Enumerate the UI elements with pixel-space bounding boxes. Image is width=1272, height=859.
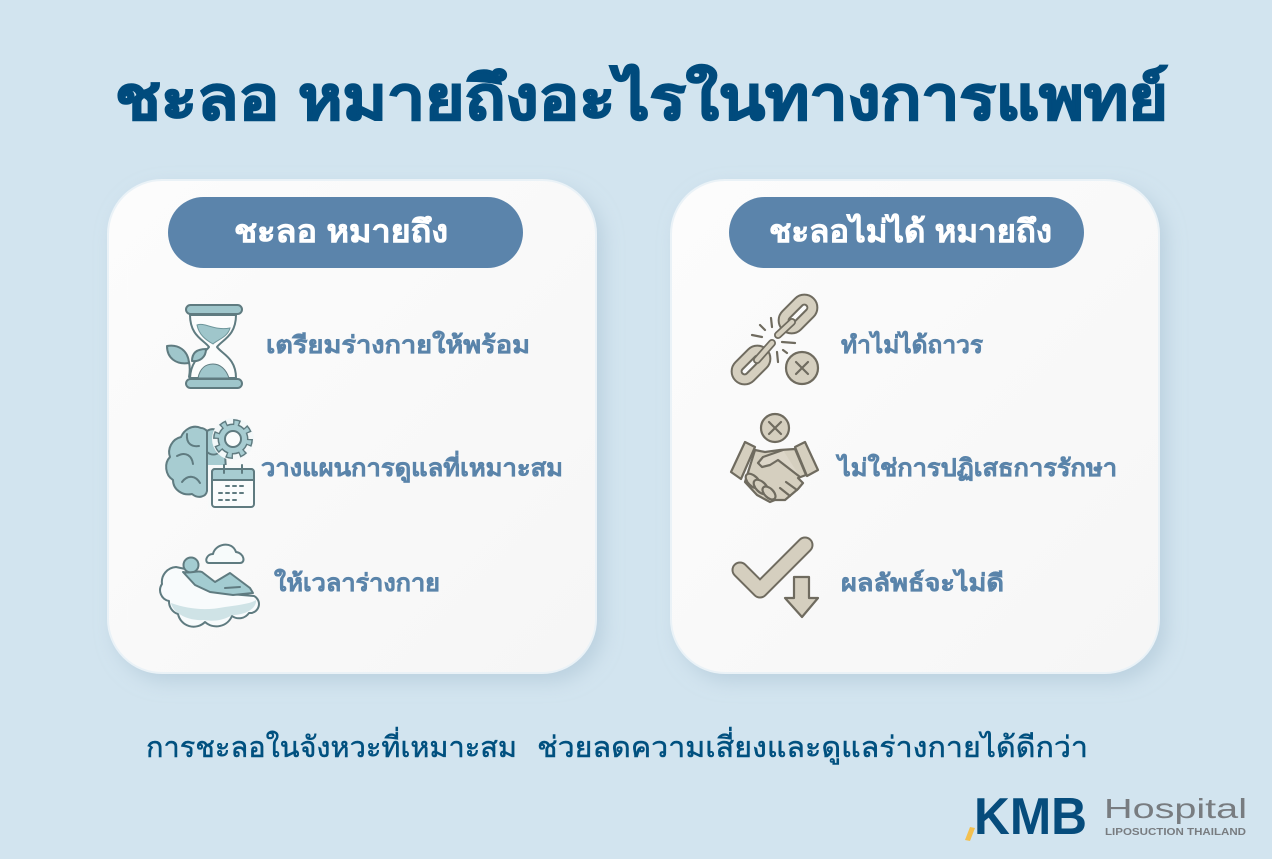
logo wordmark: KMB: [974, 788, 1087, 846]
icon: handshake with cross: [731, 414, 818, 502]
logo tagline: LIPOSUCTION THAILAND: [1105, 827, 1246, 838]
text: not refusing treatment: ไม่ใช่การปฏิเสธการรักษา: [835, 453, 1117, 482]
heading pill: right: ชะลอไม่ได้ หมายถึง: [769, 213, 1052, 249]
logo: KMB Hospital: [965, 788, 1247, 846]
icon: broken chain: [733, 296, 818, 384]
text: cannot be permanent: ทำไม่ได้ถาวร: [841, 330, 983, 359]
logo mark: [965, 827, 975, 841]
text: give body time: ให้เวลาร่างกาย: [274, 568, 440, 597]
text: results will not be good: ผลลัพธ์จะไม่ดี: [841, 568, 1004, 597]
heading pill: left: [168, 197, 523, 268]
title: ชะลอ หมายถึงอะไรในทางการแพทย์: [115, 63, 1168, 132]
panel: delay does not mean: [671, 180, 1159, 673]
icon: person resting on cloud: [160, 545, 259, 627]
bottom statement: [146, 727, 1088, 765]
icon: hourglass with leaf: [167, 305, 242, 388]
heading pill: right: [729, 197, 1084, 268]
bottom statement: ช่วยลดความเสี่ยงและดูแลร่างกายได้ดีกว่า: [537, 727, 1088, 765]
heading pill: left: ชะลอ หมายถึง: [234, 214, 448, 249]
logo hospital text: Hospital: [1104, 793, 1247, 824]
text: plan care: วางแผนการดูแลที่เหมาะสม: [261, 450, 563, 483]
text: prepare body: เตรียมร่างกายให้พร้อม: [266, 330, 530, 359]
icon: check mark with down arrow: [740, 545, 818, 617]
icon: brain, gear and calendar: [166, 418, 258, 510]
bottom statement: การชะลอในจังหวะที่เหมาะสม: [146, 727, 517, 764]
panel: what delay means: [108, 180, 596, 673]
